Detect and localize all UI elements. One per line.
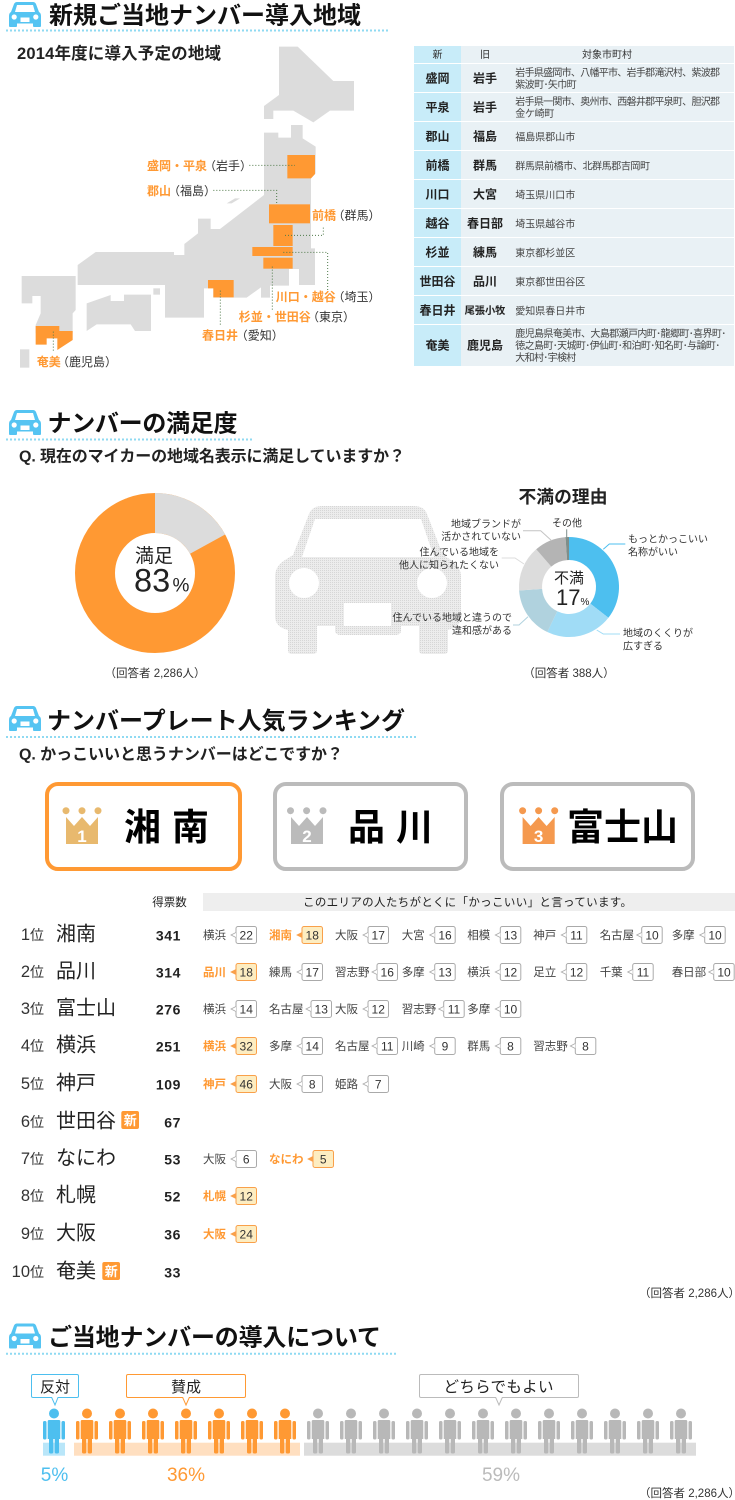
rank row 7: 53 bbox=[164, 1152, 181, 1168]
table row: Kawaguchi: 大宮 bbox=[473, 186, 497, 202]
rank row 9: 大阪 bbox=[203, 1227, 226, 1241]
rank row 6: 6位 bbox=[21, 1113, 44, 1131]
rank row 7: なにわ bbox=[269, 1153, 304, 1166]
table: new and old plate names bbox=[414, 46, 734, 366]
card: third place Fujisan: 富士山 bbox=[567, 807, 678, 848]
callout: either: どちらでもよい bbox=[444, 1378, 554, 1396]
rank row 2: 習志野 bbox=[335, 966, 370, 979]
callout: feels different bbox=[392, 611, 528, 637]
callout: other: その他 bbox=[552, 516, 582, 530]
table row: Maebashi: 群馬県前橋市、北群馬郡吉岡町 bbox=[515, 160, 650, 172]
map of Japan bbox=[20, 47, 381, 369]
callout: area too broad bbox=[597, 626, 693, 652]
table row: Morioka: 岩手 bbox=[473, 70, 497, 86]
icon: crown 3: 3 bbox=[534, 827, 543, 846]
rank row 4: 32 bbox=[240, 1040, 253, 1054]
table row: Setagaya: 東京都世田谷区 bbox=[515, 276, 585, 288]
table row: Kawaguchi: 埼玉県川口市 bbox=[515, 188, 575, 202]
heading: introduction opinion: ご当地ナンバーの導入について bbox=[48, 1324, 381, 1352]
rank row 4: 8 bbox=[582, 1040, 589, 1054]
rank row 4: 川崎 bbox=[402, 1039, 425, 1053]
rank row 8 bbox=[21, 1184, 256, 1206]
table row: Amami: 徳之島町･天城町･伊仙町･和泊町･知名町･与論町･ bbox=[515, 339, 720, 352]
table row: Koshigaya: 越谷 bbox=[425, 216, 450, 230]
table row: Amami: 鹿児島 bbox=[467, 338, 503, 352]
band: either bbox=[304, 1443, 696, 1456]
rank row 5: 46 bbox=[240, 1078, 253, 1092]
rank row 4: 251 bbox=[156, 1038, 181, 1054]
rank row 5: 神戸 bbox=[56, 1072, 96, 1094]
rank row 2 bbox=[21, 960, 734, 982]
rank row 1: 多摩 bbox=[672, 928, 695, 942]
table row: Setagaya: 世田谷 bbox=[419, 274, 456, 288]
rank row 4: 群馬 bbox=[467, 1039, 490, 1053]
map label: Kawaguchi Koshigaya: 川口・越谷 bbox=[276, 289, 336, 304]
rank row 2: 12 bbox=[570, 966, 583, 980]
table row: Maebashi: 前橋 bbox=[425, 158, 450, 172]
rank row 2: 横浜 bbox=[467, 965, 491, 979]
table: new and old plate names: 対象市町村 bbox=[582, 48, 632, 61]
rank row 5 bbox=[21, 1072, 388, 1094]
icon: car bbox=[9, 410, 41, 435]
rank row 3: 11 bbox=[448, 1002, 461, 1016]
rank row 5: 5位 bbox=[21, 1075, 44, 1093]
rank row 5: 姫路 bbox=[335, 1077, 358, 1091]
table row: Kasugai: 愛知県春日井市 bbox=[515, 304, 585, 318]
table row: Setagaya: 品川 bbox=[473, 274, 497, 288]
map label: Kawaguchi Koshigaya bbox=[276, 289, 381, 304]
rank row 3: 3位 bbox=[21, 1000, 44, 1018]
icon: car bbox=[9, 706, 41, 731]
rank row 9 bbox=[21, 1222, 256, 1244]
table row: Koshigaya bbox=[414, 209, 734, 237]
rank row 6: 新 bbox=[124, 1113, 137, 1128]
rank row 10: 奄美 bbox=[56, 1260, 96, 1282]
rank row 6 bbox=[21, 1110, 181, 1132]
card: second place Shinagawa bbox=[275, 784, 466, 869]
map label: Suginami Setagaya: （東京） bbox=[307, 310, 355, 324]
rank row 7: 大阪 bbox=[203, 1152, 226, 1166]
card: first place Shonan: 湘 bbox=[124, 807, 161, 848]
rank row 9: 9位 bbox=[21, 1225, 44, 1243]
rank row 1: 大宮 bbox=[402, 928, 425, 942]
table row: Koriyama: 郡山 bbox=[425, 130, 450, 144]
rank row 3: 13 bbox=[315, 1002, 328, 1016]
table row: Amami: 大和村･宇検村 bbox=[515, 351, 576, 364]
rank row 2: 練馬 bbox=[269, 965, 292, 979]
section: popularity ranking bbox=[6, 706, 735, 1300]
rank row 1: 神戸 bbox=[533, 928, 556, 942]
rank row 1: 1位 bbox=[21, 926, 44, 944]
callout: do not want known: 他人に知られたくない bbox=[399, 558, 499, 572]
rank row 3: 多摩 bbox=[467, 1002, 491, 1016]
rank row 2: 多摩 bbox=[402, 965, 425, 979]
table row: Kawaguchi bbox=[414, 180, 734, 208]
rank row 2: 11 bbox=[637, 966, 650, 980]
question: Q. 現在のマイカーの地域名表示に満足していますか？ bbox=[19, 446, 405, 466]
question: Q. かっこいいと思うナンバーはどこですか？ bbox=[19, 746, 343, 764]
rank row 4 bbox=[21, 1034, 596, 1056]
table row: Kasugai: 尾張小牧 bbox=[465, 304, 505, 317]
rank row 7: 5 bbox=[320, 1152, 327, 1166]
donut chart: satisfied 83%: 83 bbox=[134, 563, 170, 599]
callout: do not want known: 住んでいる地域を bbox=[420, 546, 499, 558]
donut chart: dissatisfied 17%: % bbox=[580, 597, 590, 608]
map label: Morioka Hiraizumi: （岩手） bbox=[204, 158, 252, 173]
donut chart: dissatisfied 17%: 不満 bbox=[554, 570, 584, 587]
rank row 1 bbox=[21, 922, 725, 946]
rank row 5: 7 bbox=[375, 1078, 382, 1092]
donut chart: dissatisfied 17%: 17 bbox=[556, 585, 580, 610]
band: oppose bbox=[43, 1443, 65, 1456]
rank row 2: 足立 bbox=[533, 965, 556, 979]
callout: area too broad: 地域のくくりが bbox=[623, 626, 693, 640]
map label: Amami: 奄美 bbox=[37, 354, 61, 369]
donut chart: satisfied 83%: 満足 bbox=[135, 545, 173, 567]
rank row 2: 16 bbox=[381, 966, 394, 980]
rank row 6: 67 bbox=[164, 1114, 181, 1130]
rank row 4: 14 bbox=[306, 1040, 319, 1054]
table header: votes: 得票数 bbox=[152, 896, 187, 909]
map label: Koriyama: 郡山 bbox=[147, 184, 171, 198]
table row: Koshigaya: 春日部 bbox=[467, 216, 503, 230]
respondents note: （回答者 2,286人） bbox=[105, 666, 205, 680]
table row: Hiraizumi bbox=[414, 93, 734, 121]
stat: 36%: 36% bbox=[167, 1465, 205, 1486]
table row: Morioka: 盛岡 bbox=[425, 70, 450, 86]
table row: Setagaya bbox=[414, 267, 734, 295]
callout: oppose: 反対 bbox=[40, 1379, 70, 1396]
map label: Maebashi: （群馬） bbox=[332, 208, 381, 222]
subheading: 2014 regions: 2014年度に導入予定の地域 bbox=[17, 43, 222, 63]
table row: Maebashi bbox=[414, 151, 734, 179]
rank row 2: 314 bbox=[156, 964, 181, 980]
card: first place Shonan bbox=[47, 784, 240, 869]
rank row 4: 横浜 bbox=[203, 1039, 226, 1053]
map label: Amami bbox=[37, 354, 117, 369]
heading: reasons for dissatisfaction: 不満の理由 bbox=[518, 487, 608, 507]
rank row 4: 9 bbox=[442, 1040, 449, 1054]
rank row 2: 17 bbox=[306, 966, 319, 980]
rank row 1: 10 bbox=[708, 928, 722, 942]
icon: crown 2: 2 bbox=[302, 827, 312, 846]
table row: Hiraizumi: 金ケ崎町 bbox=[515, 107, 554, 120]
table row: Koriyama: 福島県郡山市 bbox=[515, 130, 575, 144]
table header: area comment: このエリアの人たちがとくに「かっこいい」と言っています。 bbox=[303, 895, 632, 909]
map label: Koriyama: （福島） bbox=[168, 183, 216, 198]
table row: Suginami: 杉並 bbox=[425, 244, 450, 260]
rank row 3: 大阪 bbox=[335, 1002, 358, 1016]
rank row 4: 4位 bbox=[21, 1037, 44, 1055]
rank row 2: 10 bbox=[717, 966, 731, 980]
table row: Hiraizumi: 岩手 bbox=[473, 100, 497, 114]
rank row 10: 新 bbox=[105, 1264, 118, 1279]
callout: do not want known bbox=[399, 546, 524, 572]
rank row 7: 7位 bbox=[21, 1150, 44, 1168]
rank row 10 bbox=[12, 1260, 181, 1282]
map label: Maebashi bbox=[312, 208, 381, 222]
icon: crown 1: 1 bbox=[77, 827, 87, 846]
rank row 4: 8 bbox=[507, 1040, 514, 1054]
map label: Amami: （鹿児島） bbox=[57, 354, 117, 369]
rank row 7 bbox=[21, 1148, 334, 1170]
callout: feels different: 違和感がある bbox=[452, 624, 512, 637]
card: first place Shonan: 南 bbox=[172, 807, 209, 848]
rank row 1: 13 bbox=[504, 928, 517, 942]
table row: Morioka: 紫波町･矢巾町 bbox=[515, 78, 577, 91]
rank row 5: 8 bbox=[309, 1078, 316, 1092]
heading: ranking: ナンバープレート人気ランキング bbox=[47, 707, 405, 735]
map label: Koriyama bbox=[147, 183, 216, 198]
rank row 9: 36 bbox=[164, 1226, 181, 1242]
donut chart: dissatisfied 17% bbox=[519, 537, 619, 637]
rank row 9: 大阪 bbox=[56, 1222, 96, 1244]
rank row 2: 2位 bbox=[21, 963, 44, 981]
card: second place Shinagawa: 川 bbox=[396, 807, 433, 848]
pictogram: oppose person bbox=[43, 1408, 65, 1454]
section: opinion on local plates bbox=[6, 1324, 735, 1500]
rank row 4: 習志野 bbox=[533, 1040, 568, 1053]
icon: crown 3 bbox=[519, 807, 558, 846]
car silhouette bbox=[275, 506, 461, 654]
callout: support bbox=[126, 1374, 246, 1405]
map label: Maebashi: 前橋 bbox=[312, 208, 336, 222]
icon: crown 2 bbox=[287, 807, 326, 846]
rank row 3: 276 bbox=[156, 1002, 181, 1018]
callout: other bbox=[552, 516, 582, 537]
rank row 1: 18 bbox=[306, 928, 319, 942]
map label: Kasugai bbox=[202, 328, 284, 342]
rank row 3: 富士山 bbox=[56, 996, 116, 1020]
rank row 2: 品川 bbox=[203, 966, 226, 979]
table row: Morioka bbox=[414, 64, 734, 92]
rank row 1: 16 bbox=[438, 928, 452, 942]
table row: Maebashi: 群馬 bbox=[473, 158, 497, 172]
rank row 5: 109 bbox=[156, 1076, 181, 1092]
table row: Amami: 奄美 bbox=[425, 338, 450, 352]
table row: Kasugai bbox=[414, 296, 734, 324]
table row: Hiraizumi: 平泉 bbox=[425, 100, 450, 114]
rank row 3: 習志野 bbox=[402, 1003, 437, 1016]
rank row 1: 湘南 bbox=[56, 922, 96, 946]
rank row 3: 10 bbox=[504, 1002, 517, 1016]
callout: feels different: 住んでいる地域と違うので bbox=[392, 611, 512, 624]
rank row 10: 10位 bbox=[12, 1263, 44, 1281]
callout: oppose bbox=[32, 1374, 78, 1405]
pictogram: support people bbox=[76, 1408, 296, 1454]
table row: Amami bbox=[414, 325, 734, 366]
rank row 2: 13 bbox=[438, 966, 452, 980]
callout: area too broad: 広すぎる bbox=[623, 640, 663, 652]
rank row 2: 千葉 bbox=[600, 966, 623, 979]
rank row 8: 札幌 bbox=[56, 1184, 96, 1206]
rank row 10: 33 bbox=[164, 1264, 181, 1280]
stat: 59%: 59% bbox=[482, 1465, 520, 1486]
table row: Kasugai: 春日井 bbox=[419, 302, 456, 318]
callout: brand not used: 活かされていない bbox=[441, 531, 521, 543]
rank row 1: 湘南 bbox=[269, 929, 292, 942]
rank row 1: 横浜 bbox=[203, 928, 226, 942]
table row: Koshigaya: 埼玉県越谷市 bbox=[515, 218, 575, 230]
heading: satisfaction: ナンバーの満足度 bbox=[48, 410, 238, 438]
rank row 3: 横浜 bbox=[203, 1002, 226, 1016]
rank row 8: 8位 bbox=[21, 1187, 44, 1205]
rank row 3: 14 bbox=[240, 1002, 253, 1016]
rank row 6: 世田谷 bbox=[56, 1110, 116, 1132]
rank row 8: 52 bbox=[164, 1188, 181, 1204]
icon: crown 1 bbox=[62, 807, 102, 846]
card: second place Shinagawa: 品 bbox=[348, 807, 385, 848]
table row: Suginami: 東京都杉並区 bbox=[515, 246, 575, 260]
table row: Suginami: 練馬 bbox=[473, 244, 497, 260]
table row: Morioka: 岩手県盛岡市、八幡平市、岩手郡滝沢村、紫波郡 bbox=[515, 66, 720, 79]
rank row 5: 大阪 bbox=[269, 1077, 292, 1091]
map label: Morioka Hiraizumi: 盛岡・平泉 bbox=[147, 158, 207, 173]
rank row 2: 12 bbox=[504, 966, 517, 980]
table row: Amami: 鹿児島県奄美市、大島郡瀬戸内町･龍郷町･喜界町･ bbox=[515, 327, 726, 340]
rank row 1: 341 bbox=[156, 928, 181, 944]
rank row 1: 大阪 bbox=[335, 928, 358, 942]
callout: cooler name: もっとかっこいい bbox=[628, 534, 708, 546]
rank row 4: 11 bbox=[381, 1040, 394, 1054]
rank row 2: 春日部 bbox=[672, 966, 707, 979]
rank row 8: 札幌 bbox=[203, 1189, 226, 1203]
map label: Kawaguchi Koshigaya: （埼玉） bbox=[332, 290, 381, 304]
map label: Kasugai: （愛知） bbox=[236, 328, 284, 342]
rank row 9: 24 bbox=[240, 1228, 253, 1242]
table row: Koriyama: 福島 bbox=[473, 128, 497, 144]
respondents note: （回答者 388人） bbox=[523, 666, 615, 680]
donut chart: satisfied 83%: % bbox=[172, 576, 190, 597]
map label: Kasugai: 春日井 bbox=[202, 328, 238, 342]
table row: Kawaguchi: 川口 bbox=[425, 188, 450, 202]
rank row 7: 6 bbox=[243, 1152, 250, 1166]
rank row 1: 17 bbox=[372, 928, 385, 942]
pictogram: either people bbox=[307, 1408, 692, 1454]
callout: support: 賛成 bbox=[171, 1379, 201, 1396]
table header: area comment bbox=[203, 893, 735, 911]
callout: either bbox=[420, 1374, 578, 1405]
table row: Koriyama bbox=[414, 122, 734, 150]
section: satisfaction bbox=[6, 410, 708, 680]
rank row 3: 名古屋 bbox=[269, 1002, 304, 1016]
donut chart: satisfied 83% bbox=[95, 493, 225, 633]
rank row 2: 18 bbox=[240, 966, 253, 980]
callout: brand not used bbox=[441, 518, 552, 543]
map label: Suginami Setagaya bbox=[239, 309, 355, 324]
rank row 2: 品川 bbox=[56, 960, 96, 982]
table row: Suginami bbox=[414, 238, 734, 266]
rank row 8: 12 bbox=[240, 1190, 253, 1204]
rank row 5: 神戸 bbox=[203, 1077, 226, 1091]
map label: Suginami Setagaya: 杉並・世田谷 bbox=[239, 309, 311, 324]
card: third place Fujisan bbox=[502, 784, 693, 869]
stat: 5%: 5% bbox=[41, 1465, 68, 1486]
callout: cooler name bbox=[603, 534, 708, 558]
table: new and old plate names: 新 bbox=[432, 49, 442, 61]
rank row 1: 相模 bbox=[467, 929, 491, 942]
rank row 1: 11 bbox=[570, 928, 583, 942]
callout: cooler name: 名称がいい bbox=[628, 546, 678, 558]
rank row 1: 10 bbox=[645, 928, 659, 942]
heading: new plate regions: 新規ご当地ナンバー導入地域 bbox=[49, 2, 361, 30]
band: support bbox=[74, 1443, 300, 1456]
icon: car bbox=[9, 2, 41, 27]
rank row 4: 名古屋 bbox=[335, 1039, 370, 1053]
icon: car bbox=[9, 1324, 41, 1348]
table: new and old plate names: 旧 bbox=[480, 49, 490, 61]
rank row 1: 22 bbox=[240, 928, 253, 942]
rank row 3 bbox=[21, 996, 521, 1020]
map label: Morioka Hiraizumi bbox=[147, 158, 252, 173]
rank row 3: 12 bbox=[372, 1002, 385, 1016]
rank row 4: 多摩 bbox=[269, 1039, 292, 1053]
table row: Hiraizumi: 岩手県一関市、奥州市、西磐井郡平泉町、胆沢郡 bbox=[515, 95, 720, 108]
rank row 4: 横浜 bbox=[56, 1034, 96, 1056]
callout: brand not used: 地域ブランドが bbox=[451, 518, 521, 530]
rank row 1: 名古屋 bbox=[600, 928, 634, 942]
rank row 7: なにわ bbox=[56, 1148, 116, 1170]
